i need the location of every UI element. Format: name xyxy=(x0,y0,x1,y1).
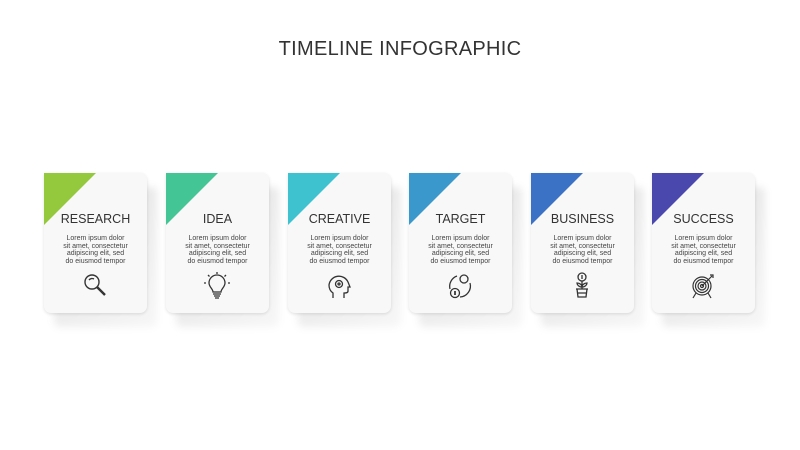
text: success: do eiusmod tempor xyxy=(674,258,733,265)
text: research: sit amet, consectetur xyxy=(63,243,128,250)
text: idea xyxy=(185,234,250,265)
text: research xyxy=(63,234,128,265)
icon: gear money cycle xyxy=(449,274,472,298)
heading: business: BUSINESS xyxy=(551,212,614,226)
text: target: adipiscing elit, sed xyxy=(432,250,489,257)
panel: target xyxy=(408,173,523,327)
text: creative: Lorem ipsum dolor xyxy=(311,235,368,242)
icon: target xyxy=(692,274,714,298)
text: business: Lorem ipsum dolor xyxy=(554,235,611,242)
panel: idea xyxy=(165,173,280,327)
text: business: sit amet, consectetur xyxy=(550,243,615,250)
text: idea: sit amet, consectetur xyxy=(185,243,250,250)
icon: bulb xyxy=(204,272,230,299)
title: TIMELINE INFOGRAPHIC xyxy=(279,38,521,60)
text: target xyxy=(428,234,493,265)
text: idea: do eiusmod tempor xyxy=(188,258,247,265)
text: business: do eiusmod tempor xyxy=(553,258,612,265)
text: creative: sit amet, consectetur xyxy=(307,243,372,250)
text: research: Lorem ipsum dolor xyxy=(67,235,124,242)
text: success: Lorem ipsum dolor xyxy=(675,235,732,242)
panel: creative xyxy=(287,173,402,327)
text: creative xyxy=(307,234,372,265)
heading: target: TARGET xyxy=(436,212,485,226)
heading: creative: CREATIVE xyxy=(309,212,370,226)
text: research: adipiscing elit, sed xyxy=(67,250,124,257)
text: success: sit amet, consectetur xyxy=(671,243,736,250)
text: creative: do eiusmod tempor xyxy=(310,258,369,265)
text: creative: adipiscing elit, sed xyxy=(311,250,368,257)
panel: business xyxy=(530,173,645,327)
text: target: Lorem ipsum dolor xyxy=(432,235,489,242)
text: target: sit amet, consectetur xyxy=(428,243,493,250)
text: target: do eiusmod tempor xyxy=(431,258,490,265)
panel: success xyxy=(651,173,766,327)
text: idea: Lorem ipsum dolor xyxy=(189,235,246,242)
text: business: adipiscing elit, sed xyxy=(554,250,611,257)
heading: research: RESEARCH xyxy=(61,212,130,226)
text: success xyxy=(671,234,736,265)
panel: research xyxy=(43,173,158,327)
text: idea: adipiscing elit, sed xyxy=(189,250,246,257)
heading: idea: IDEA xyxy=(203,212,232,226)
icon: money plant xyxy=(576,272,588,298)
text: success: adipiscing elit, sed xyxy=(675,250,732,257)
icon: magnifier xyxy=(84,274,106,296)
heading: success: SUCCESS xyxy=(673,212,734,226)
text: research: do eiusmod tempor xyxy=(66,258,125,265)
icon: head gear xyxy=(328,276,351,298)
text: business xyxy=(550,234,615,265)
